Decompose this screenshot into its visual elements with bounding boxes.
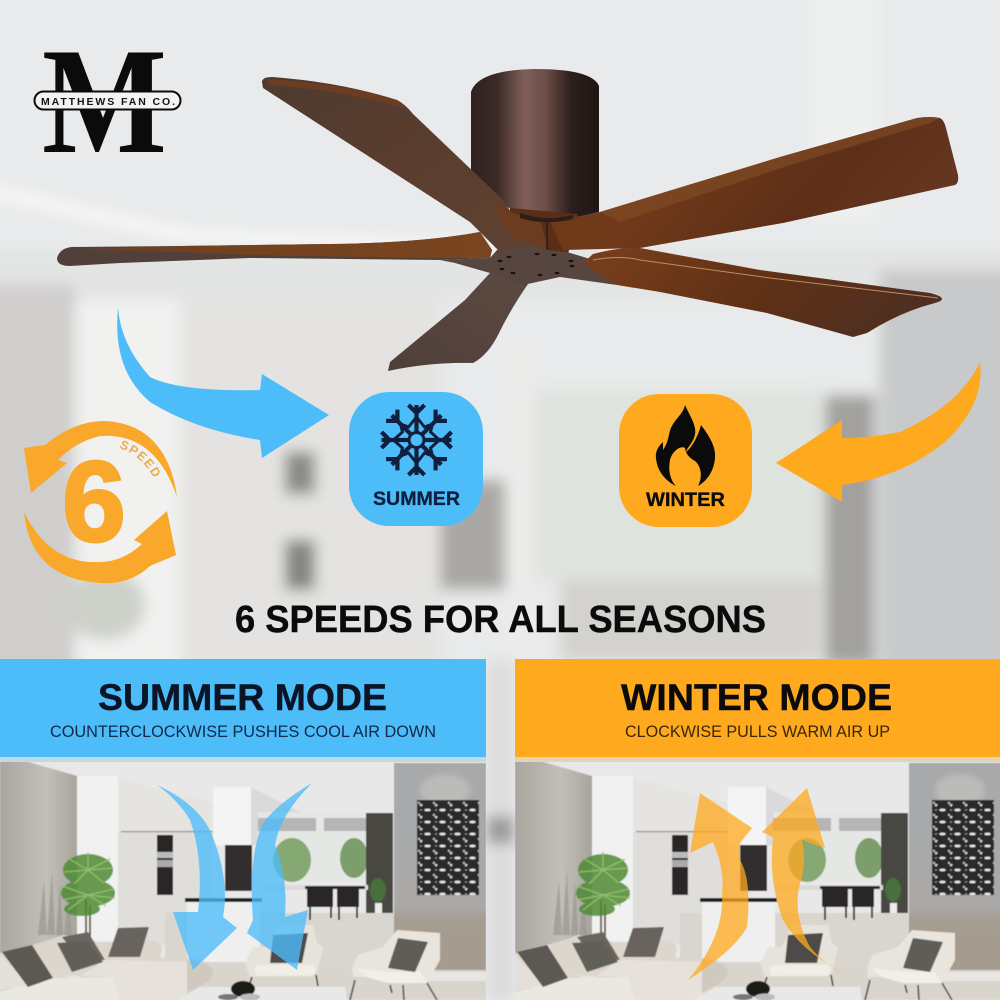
fan hub (440, 213, 617, 285)
panel: winter mode header (515, 659, 1000, 757)
winter description: CLOCKWISE PULLS WARM AIR UP (625, 723, 890, 741)
blade: left thin (57, 232, 492, 266)
blade: upper left (262, 77, 548, 252)
arrow: left downward airflow (157, 785, 237, 970)
arrow: orange winter arrow (776, 362, 981, 502)
numeral six: 6 (62, 439, 126, 566)
blade: lower right (583, 248, 942, 337)
label: summer: SUMMER (373, 489, 460, 510)
arrow: right upward airflow (762, 788, 843, 973)
icon: six speed (24, 421, 177, 584)
icon card: summer (349, 392, 483, 526)
blade: lower left (388, 273, 528, 371)
panel: summer room with downward airflow (0, 757, 486, 1000)
icon: snowflake (382, 405, 452, 475)
label: winter: WINTER (646, 490, 725, 511)
panel: winter room with upward airflow (515, 757, 1000, 1000)
fan motor housing (471, 69, 599, 218)
summer description: COUNTERCLOCKWISE PUSHES COOL AIR DOWN (50, 723, 436, 741)
ceiling fan (57, 69, 958, 371)
blade: upper right (550, 117, 958, 250)
title: 6 SPEEDS FOR ALL SEASONS (235, 599, 766, 641)
winter heading: WINTER MODE (621, 677, 892, 718)
summer heading: SUMMER MODE (98, 677, 387, 718)
arrow: blue summer arrow (117, 308, 329, 458)
upper rotating arrow (24, 421, 177, 497)
speed label: SPEED (120, 440, 160, 476)
panel: summer mode header (0, 659, 486, 757)
arrow: right downward airflow (247, 783, 312, 970)
lower rotating arrow (24, 511, 176, 583)
logo: Matthews Fan Co.: MATTHEWS FAN CO. (41, 96, 175, 108)
arrow: left upward airflow (688, 793, 752, 980)
logo: Matthews Fan Co.: M (42, 16, 167, 185)
icon: flame (656, 405, 715, 486)
icon card: winter (619, 394, 752, 527)
